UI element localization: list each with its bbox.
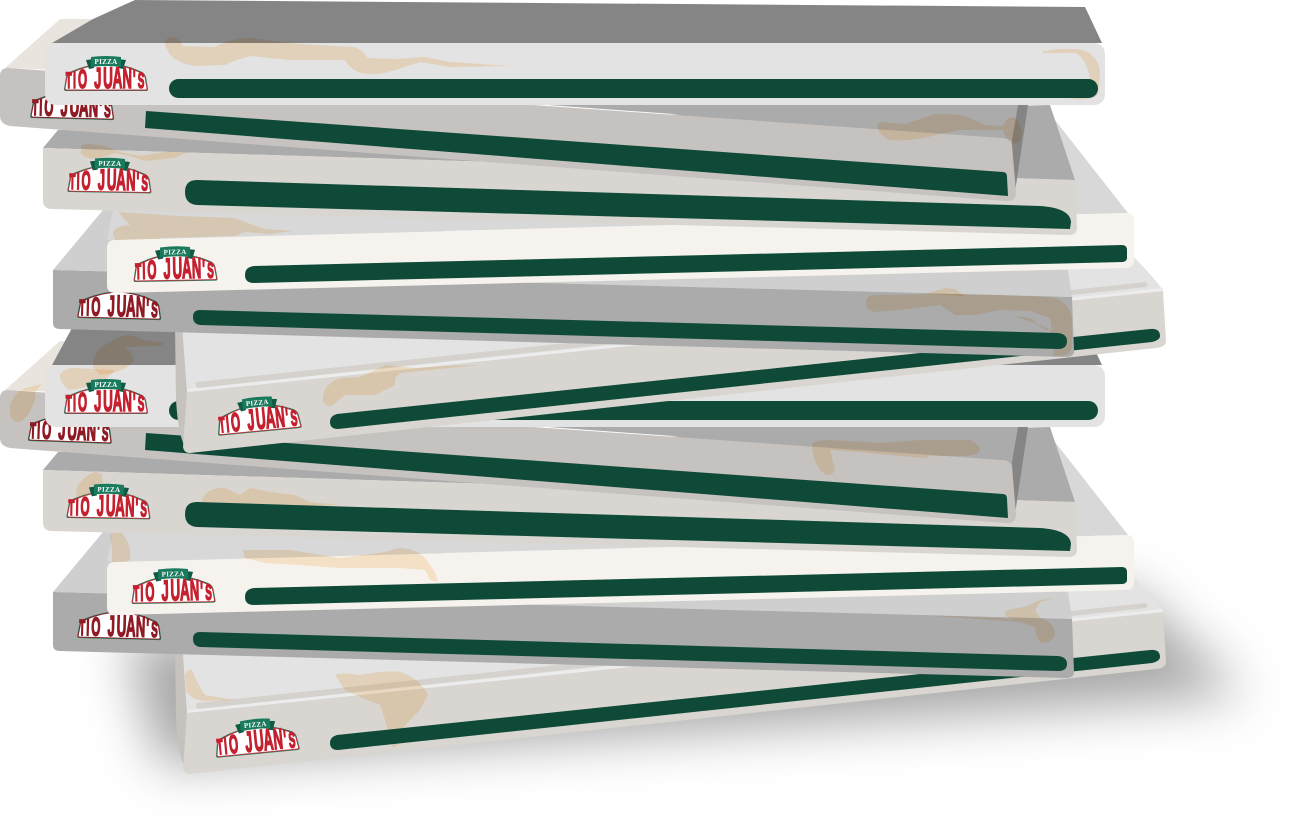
logo: A xyxy=(76,413,87,446)
logo: J xyxy=(107,290,115,322)
logo: S xyxy=(101,421,109,446)
logo: PIZZA xyxy=(98,160,121,168)
logo: O xyxy=(91,613,104,642)
logo: J xyxy=(60,90,68,122)
logo: I xyxy=(140,579,144,606)
logo: S xyxy=(140,497,147,522)
box 8: upper gray box xyxy=(53,210,1074,357)
logo: U xyxy=(105,489,116,522)
logo: ' xyxy=(99,95,102,123)
logo: O xyxy=(81,167,94,196)
logo: ' xyxy=(135,494,138,523)
logo: A xyxy=(116,163,126,196)
logo: U xyxy=(116,289,127,323)
logo: J xyxy=(107,610,115,642)
logo: A xyxy=(182,251,192,285)
logo: N xyxy=(88,91,99,123)
logo: S xyxy=(151,298,158,322)
logo: A xyxy=(113,384,122,417)
logo: I xyxy=(142,257,146,284)
logo: U xyxy=(172,251,183,285)
box 10: upper beige box xyxy=(43,105,1077,235)
box 7: middle tilted box xyxy=(175,256,1166,453)
logo: U xyxy=(116,609,127,643)
box 11: upper taupe box sloping down xyxy=(0,19,1028,201)
logo: S xyxy=(138,69,144,93)
logo: J xyxy=(97,164,105,196)
logo: T xyxy=(68,496,75,520)
logo: PIZZA xyxy=(95,58,117,66)
logo: N xyxy=(123,62,132,94)
logo: J xyxy=(246,404,256,436)
box 2: gray box xyxy=(53,532,1074,678)
logo: T xyxy=(79,616,86,640)
logo: O xyxy=(44,93,57,122)
logo: A xyxy=(126,609,136,643)
logo: U xyxy=(106,163,117,196)
logo: O xyxy=(42,417,55,445)
logo: PIZZA xyxy=(164,248,187,256)
logo: S xyxy=(288,728,296,753)
logo: A xyxy=(264,400,277,435)
logo: N xyxy=(135,291,146,323)
logo: ' xyxy=(136,168,139,197)
logo: O xyxy=(230,409,245,438)
logo: N xyxy=(135,611,146,643)
logo: S xyxy=(151,618,158,642)
logo: T xyxy=(66,69,72,93)
logo: T xyxy=(30,419,37,443)
logo: U xyxy=(103,384,113,417)
logo: A xyxy=(115,489,125,522)
logo: PIZZA xyxy=(97,486,120,494)
logo: J xyxy=(161,575,169,607)
logo xyxy=(213,715,300,761)
logo: J xyxy=(94,62,101,94)
logo: S xyxy=(104,98,111,122)
logo: I xyxy=(86,293,90,320)
logo: I xyxy=(223,732,228,759)
logo: A xyxy=(113,61,122,94)
logo: T xyxy=(133,582,140,606)
logo: O xyxy=(147,257,160,285)
logo: N xyxy=(192,252,202,284)
logo xyxy=(64,379,148,417)
logo: ' xyxy=(133,66,136,94)
logo: ' xyxy=(282,726,288,755)
box 12: top box xyxy=(45,0,1105,105)
logo: ' xyxy=(146,615,149,643)
logo: S xyxy=(141,171,148,196)
logo: T xyxy=(66,392,72,416)
logo: U xyxy=(170,573,181,607)
logo: ' xyxy=(202,256,205,284)
logo: S xyxy=(205,580,212,605)
logo: S xyxy=(138,392,144,416)
logo: S xyxy=(207,258,214,283)
logo: U xyxy=(69,89,80,123)
logo xyxy=(77,288,162,324)
logo: T xyxy=(216,735,225,760)
logo: T xyxy=(69,170,76,194)
logo: T xyxy=(79,296,86,320)
logo: U xyxy=(103,61,113,94)
logo: ' xyxy=(97,418,100,447)
logo: O xyxy=(80,493,93,522)
box 5: taupe box sloping down xyxy=(0,341,1028,523)
logo: I xyxy=(39,93,43,120)
logo: J xyxy=(94,385,101,417)
logo: N xyxy=(190,574,200,606)
logo: J xyxy=(96,490,104,522)
logo: ' xyxy=(200,578,203,606)
logo xyxy=(133,246,218,285)
logo: U xyxy=(67,412,78,446)
box 9: upper cream box xyxy=(107,120,1134,293)
logo: J xyxy=(244,726,254,758)
logo: T xyxy=(32,96,39,120)
logo xyxy=(77,608,162,644)
logo xyxy=(64,56,148,94)
logo xyxy=(66,483,151,523)
logo: T xyxy=(135,260,142,284)
logo: O xyxy=(145,579,158,607)
logo: ' xyxy=(284,404,290,433)
logo: I xyxy=(225,410,230,437)
logo: A xyxy=(126,289,136,323)
logo: I xyxy=(75,493,79,520)
logo: N xyxy=(125,490,135,523)
box 6: light gray box xyxy=(45,328,1105,427)
ground shadow xyxy=(125,590,1245,765)
logo: S xyxy=(290,406,298,431)
logo: U xyxy=(254,401,267,436)
logo xyxy=(67,157,152,197)
box 3: cream box xyxy=(107,442,1134,615)
logo: A xyxy=(79,89,89,123)
logo: N xyxy=(272,723,284,756)
box 4: beige box xyxy=(43,427,1077,557)
logo: ' xyxy=(133,389,136,417)
logo xyxy=(131,568,216,607)
logo: I xyxy=(37,416,41,444)
logo: U xyxy=(252,723,265,758)
logo: O xyxy=(228,731,243,760)
logo: O xyxy=(78,389,90,417)
logo xyxy=(30,88,115,124)
logo: A xyxy=(180,573,190,607)
logo: J xyxy=(58,413,66,446)
logo: PIZZA xyxy=(244,720,267,730)
logo: PIZZA xyxy=(246,398,269,408)
logo: T xyxy=(218,413,227,438)
logo: N xyxy=(274,401,286,434)
logo: O xyxy=(78,66,90,94)
logo: A xyxy=(262,722,275,757)
box 1: bottom tilted box xyxy=(175,577,1166,774)
logo: J xyxy=(163,253,171,285)
logo: PIZZA xyxy=(95,381,117,389)
logo: I xyxy=(73,389,76,416)
logo: I xyxy=(76,167,80,194)
logo: I xyxy=(86,613,90,640)
logo: N xyxy=(86,414,97,447)
logo: PIZZA xyxy=(162,570,185,578)
logo: I xyxy=(73,66,76,93)
logo: N xyxy=(126,164,136,197)
logo xyxy=(28,411,113,447)
logo: O xyxy=(91,293,104,322)
logo: ' xyxy=(146,295,149,323)
logo: N xyxy=(123,385,132,417)
logo xyxy=(215,393,302,439)
